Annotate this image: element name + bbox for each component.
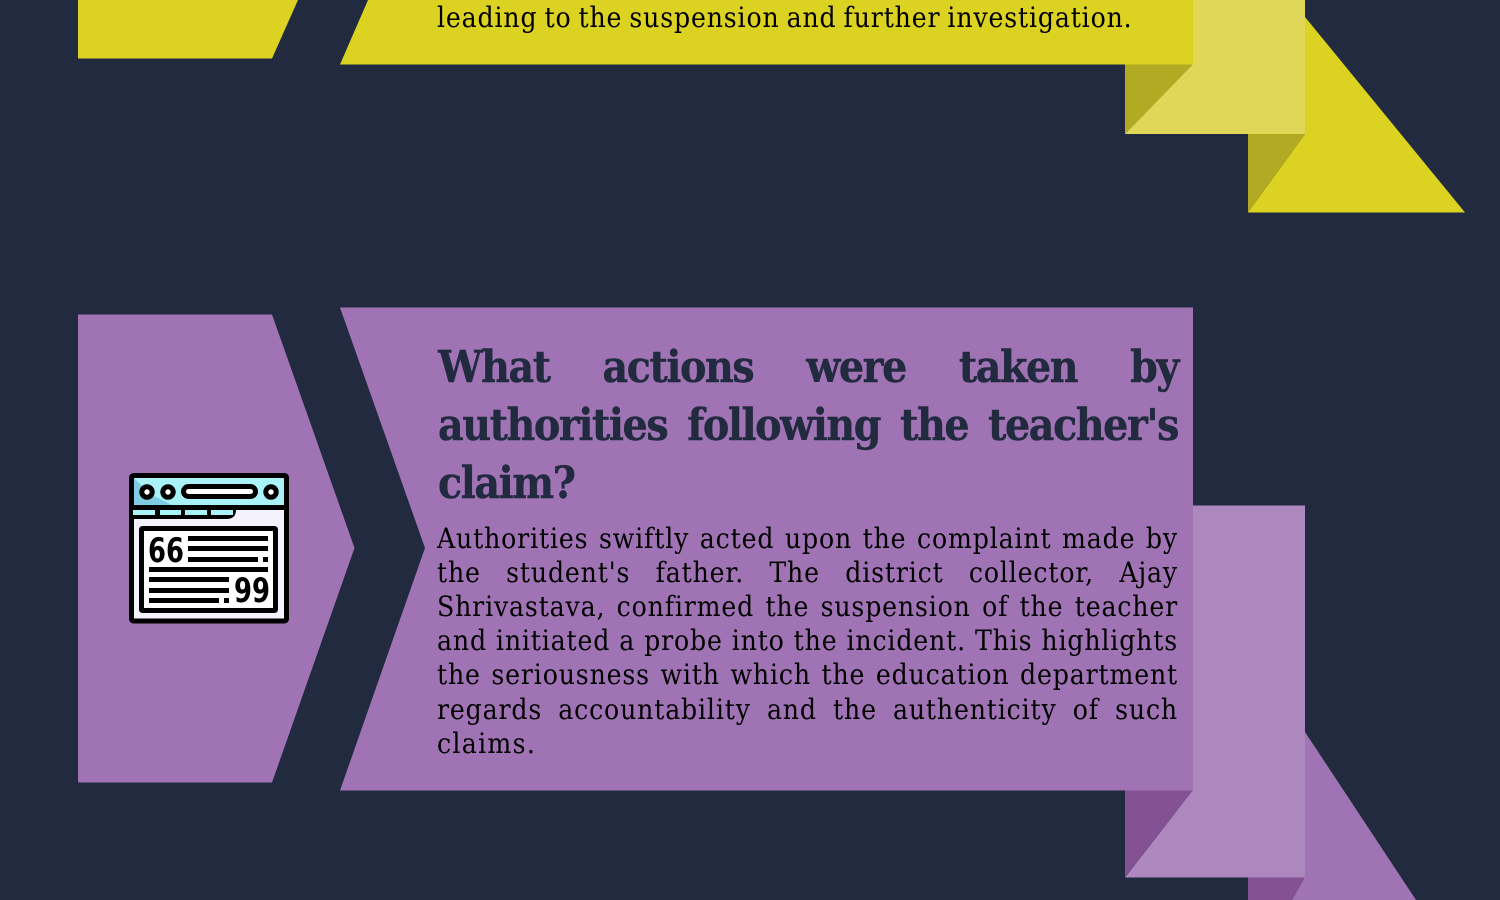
purple tag panel xyxy=(78,314,354,782)
text: answer paragraph: and initiated a probe into the incident. This highlights xyxy=(437,624,1178,657)
heading: question: authorities following the teacher's xyxy=(438,400,1178,451)
text: answer paragraph xyxy=(436,522,1178,760)
icon: browser window with quotation: 66 xyxy=(148,531,184,571)
text: answer paragraph: the seriousness with which the education department xyxy=(437,658,1178,691)
yellow ribbon fold xyxy=(1125,0,1465,212)
text: answer paragraph: claims. xyxy=(437,727,536,760)
text: end of previous answer: leading to the suspension and further investigation. xyxy=(437,1,1133,34)
heading: question: What actions were taken by xyxy=(438,342,1178,393)
yellow main panel xyxy=(340,0,1193,64)
icon: browser window with quotation xyxy=(131,476,287,621)
heading: question: claim? xyxy=(438,458,575,509)
heading: question xyxy=(438,342,1181,509)
text: answer paragraph: Authorities swiftly acted upon the complaint made by xyxy=(437,522,1178,555)
yellow tag panel xyxy=(78,0,298,58)
icon: browser window with quotation: 99 xyxy=(234,571,270,611)
text: answer paragraph: regards accountability and the authenticity of such xyxy=(437,693,1178,726)
purple main panel xyxy=(340,308,1193,790)
text: answer paragraph: Shrivastava, confirmed the suspension of the teacher xyxy=(437,590,1178,623)
text: answer paragraph: the student's father. The district collector, Ajay xyxy=(437,556,1178,589)
purple ribbon fold xyxy=(1125,506,1416,900)
